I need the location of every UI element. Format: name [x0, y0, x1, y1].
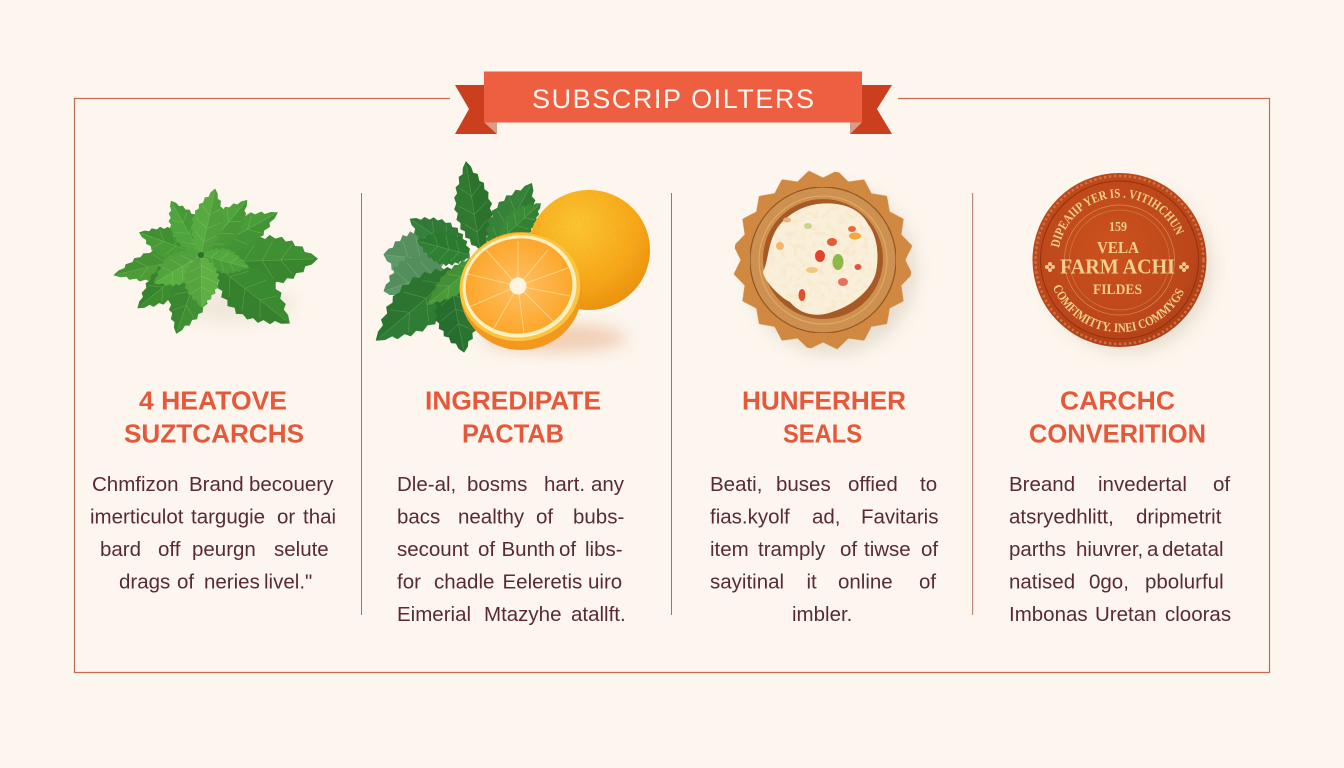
body text: to — [920, 473, 937, 496]
heading: CONVERITION — [1029, 419, 1206, 449]
filling — [763, 203, 878, 315]
body text — [710, 473, 938, 626]
body text: Beati, — [710, 473, 762, 496]
body text: of — [921, 538, 938, 561]
body text: it — [806, 570, 817, 594]
title: SUBSCRIP OILTERS — [532, 84, 814, 114]
heading: CARCHC — [1060, 386, 1175, 416]
shadow — [483, 324, 627, 352]
body text: Breand — [1009, 473, 1075, 496]
body text: selute — [274, 538, 329, 561]
ribbon left tail — [455, 85, 497, 134]
body text: of — [919, 570, 936, 594]
body text: online — [838, 570, 893, 594]
body text: Mtazyhe — [484, 603, 561, 626]
body text: for — [397, 570, 421, 594]
body text: of — [177, 570, 194, 594]
body text: Eeleretis — [502, 570, 582, 594]
body text — [90, 473, 336, 594]
shadow — [1044, 184, 1212, 352]
body text: nealthy — [458, 506, 525, 528]
body text: any — [591, 473, 625, 496]
body text: invedertal — [1098, 473, 1187, 496]
icon: farm seal: FILDES — [1093, 282, 1142, 298]
seal florets — [1045, 262, 1189, 272]
body text: buses — [776, 473, 831, 496]
body text: secount — [397, 538, 469, 561]
body text: item — [710, 538, 749, 561]
body text: livel." — [264, 570, 312, 594]
body text: pbolurful — [1145, 570, 1224, 594]
body text: offied — [848, 473, 898, 496]
body text: off — [158, 538, 181, 561]
icon: scalloped bowl with filling — [721, 158, 925, 362]
heading: 4 HEATOVE — [139, 386, 287, 416]
body text: atsryedhlitt, — [1009, 506, 1114, 528]
shadow — [748, 186, 916, 354]
body text: parths — [1009, 538, 1066, 561]
body text: of — [559, 538, 576, 561]
heading — [124, 386, 304, 449]
body text: drags — [119, 570, 170, 594]
icon: farm seal: FARM ACHI — [1060, 254, 1175, 278]
seal arc text: DIPEAIIP YER IS . VITIHCHUN — [1050, 188, 1184, 248]
panel: column 4 — [1009, 173, 1231, 626]
body text: or — [277, 506, 295, 528]
body text: bubs- — [573, 506, 624, 528]
icon: farm seal: VELA — [1097, 238, 1140, 257]
body text: of — [1213, 473, 1230, 496]
body text: clooras — [1165, 603, 1231, 626]
title ribbon — [455, 72, 892, 134]
body text: of — [478, 538, 495, 561]
body text: a — [1147, 538, 1159, 561]
body text: imbler. — [792, 603, 852, 626]
body text: targugie — [191, 506, 265, 528]
heading: SUZTCARCHS — [124, 419, 304, 449]
heading — [742, 386, 906, 449]
panel: column 2 — [359, 158, 650, 626]
panel: column 3 — [710, 158, 938, 626]
body text: Dle-al, — [397, 473, 456, 496]
body text: dripmetrit — [1136, 506, 1222, 528]
body text: natised — [1009, 570, 1075, 594]
heading: PACTAB — [462, 419, 564, 449]
body text: hiuvrer, — [1076, 538, 1143, 561]
icon: leaves and orange — [359, 158, 650, 360]
body text: Chmfizon — [92, 473, 179, 496]
body text: peurgn — [192, 538, 256, 561]
icon: green leaf cluster — [110, 185, 319, 344]
body text: bacs — [397, 506, 440, 528]
leaves — [359, 158, 552, 360]
heading — [425, 386, 601, 449]
column dividers — [361, 193, 973, 615]
body text: Bunth — [502, 538, 555, 561]
body text: uiro — [588, 570, 622, 594]
ribbon body — [484, 72, 862, 122]
seal center text: 159 — [1109, 219, 1127, 234]
body text: hart. — [544, 473, 585, 496]
body text: Eimerial — [397, 603, 471, 626]
heading: SEALS — [783, 419, 862, 449]
body text: imerticulot — [90, 506, 184, 528]
body text: of — [536, 506, 553, 528]
seal disc — [1032, 173, 1206, 347]
body text: fias.kyolf — [710, 506, 790, 528]
heading: HUNFERHER — [742, 386, 906, 416]
body text — [397, 473, 626, 626]
body text: ad, — [812, 506, 840, 528]
body text: of — [840, 538, 857, 561]
body text: chadle — [434, 570, 494, 594]
body text: thai — [303, 506, 336, 528]
icon: farm seal: COMFIMITTY. INEI COMMYGS — [1054, 285, 1184, 332]
body text: neries — [204, 570, 260, 594]
body text: tiwse — [864, 538, 911, 561]
body text: Brand — [189, 473, 244, 496]
body text: Favitaris — [861, 506, 938, 528]
body text: atallft. — [571, 603, 626, 626]
icon: farm seal — [1032, 173, 1216, 356]
body text: sayitinal — [710, 570, 784, 594]
body text: Imbonas — [1009, 603, 1088, 626]
outer frame — [74, 98, 1270, 672]
panel: column 1 — [90, 185, 336, 594]
body text: Uretan — [1095, 603, 1157, 626]
filling colored bits — [776, 218, 862, 301]
half orange — [453, 225, 587, 350]
heading: INGREDIPATE — [425, 386, 601, 416]
heading — [1029, 386, 1206, 449]
body text: detatal — [1162, 538, 1224, 561]
ribbon right tail — [850, 85, 892, 134]
body text: bosms — [467, 473, 527, 496]
body text: bard — [100, 538, 141, 561]
body text: 0go, — [1089, 570, 1129, 594]
whole orange — [528, 190, 650, 310]
body text: tramply — [758, 538, 826, 561]
body text: libs- — [585, 538, 623, 561]
ribbon folds — [484, 122, 862, 134]
body text: becouery — [249, 473, 334, 496]
scalloped rim — [721, 158, 925, 362]
body text — [1009, 473, 1231, 626]
